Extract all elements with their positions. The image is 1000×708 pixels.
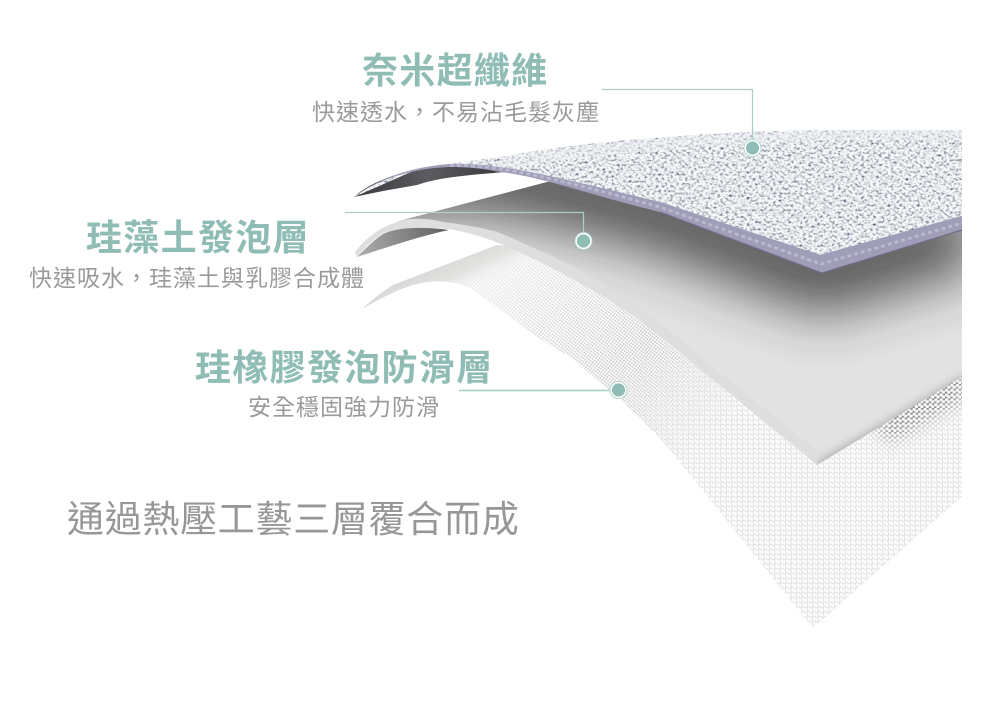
text: anti-slip description: 安全穩固強力防滑: [248, 394, 440, 420]
title: silicone rubber anti-slip layer: 珪橡膠發泡防滑層: [195, 347, 493, 388]
title: nano microfiber: 奈米超纖維: [362, 50, 549, 91]
title: diatomite foam layer: 珪藻土發泡層: [86, 217, 310, 258]
marker dot: microfiber: [744, 139, 761, 157]
text: nano microfiber description: 快速透水，不易沾毛髮灰塵: [312, 99, 600, 125]
leader line: anti-slip: [459, 390, 610, 392]
sub-element: sheet underside: [354, 165, 505, 197]
sub-element: foam top surface: [355, 170, 962, 465]
text: process statement: 通過熱壓工藝三層覆合而成: [67, 499, 519, 540]
sub-element: foam front lip: [355, 219, 817, 465]
layer: bottom anti-slip mesh: [362, 245, 962, 628]
text: diatomite description: 快速吸水，珪藻土與乳膠合成體: [29, 265, 365, 291]
sub-element: foam underside: [357, 228, 449, 257]
sub-element: speckled surface: [354, 130, 962, 255]
layer: top microfiber sheet: [354, 130, 962, 273]
layer: middle diatomite foam: [340, 170, 970, 470]
marker dot: anti-slip: [610, 381, 627, 399]
leader line: diatomite: [345, 212, 584, 232]
sub-element: purple border binding: [354, 164, 962, 273]
marker dot: diatomite: [575, 232, 592, 250]
leader line: microfiber: [602, 90, 752, 140]
